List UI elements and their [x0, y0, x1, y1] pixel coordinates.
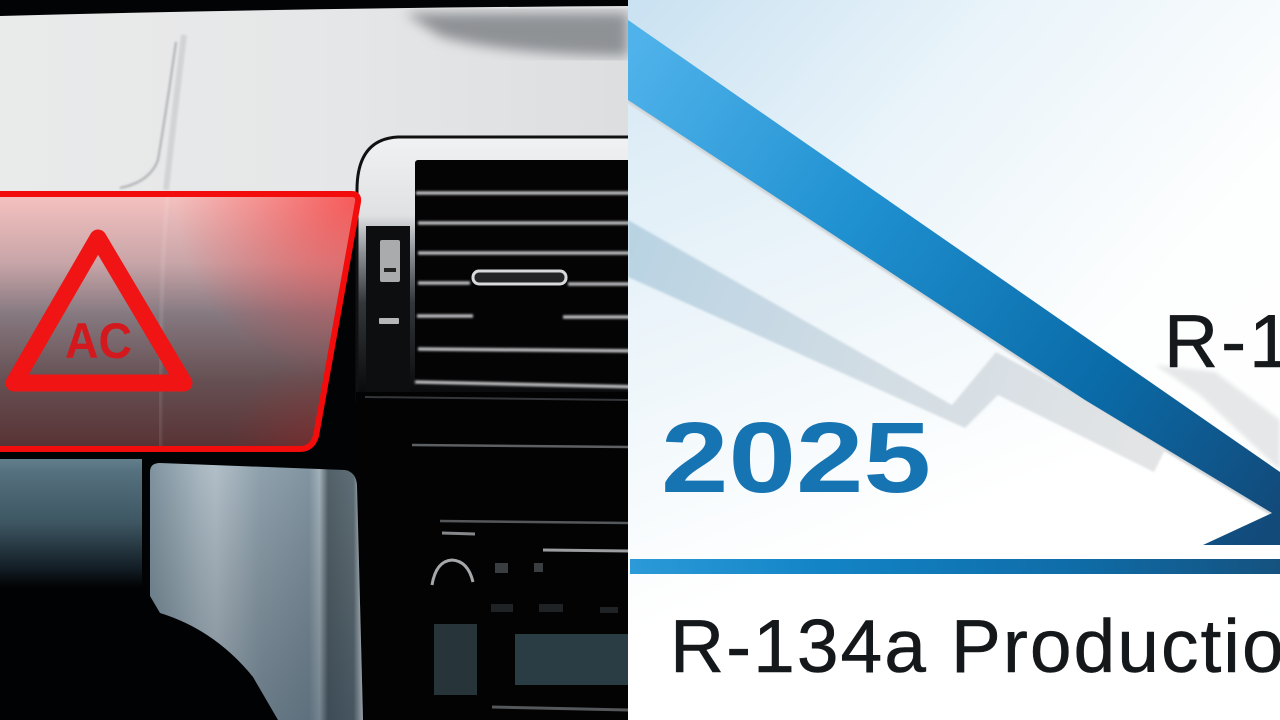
- left lower trim panel: [0, 459, 142, 587]
- dashboard top surface: [0, 6, 628, 192]
- steering wheel shadow: [150, 596, 278, 720]
- arrow underside shadow: [628, 100, 1272, 513]
- AC label: AC: [65, 313, 132, 369]
- panel: car dashboard photo: [0, 0, 640, 720]
- vent surround: [357, 137, 640, 400]
- panel: R-134a phase-out graphic: [628, 0, 1280, 720]
- black lower console: [356, 392, 628, 402]
- shadow arrow: [628, 220, 1165, 472]
- lower background: [628, 104, 752, 720]
- vent control knob: [366, 226, 410, 370]
- icon: AC warning triangle: [14, 238, 184, 383]
- radio unit: [412, 445, 628, 710]
- air vent: [415, 160, 640, 387]
- dashboard crease: [120, 35, 184, 190]
- dashboard top shadow: [405, 13, 628, 56]
- vent louver handle: [473, 271, 566, 284]
- radio knob: [432, 560, 473, 585]
- pale shadow right of arrow: [1155, 365, 1280, 470]
- year label: 2025: [661, 402, 931, 514]
- blue down-trending arrow: [628, 20, 1280, 545]
- divider bar: [630, 559, 1280, 574]
- red warning panel: [0, 194, 358, 449]
- centre lower trim panel: [150, 463, 363, 720]
